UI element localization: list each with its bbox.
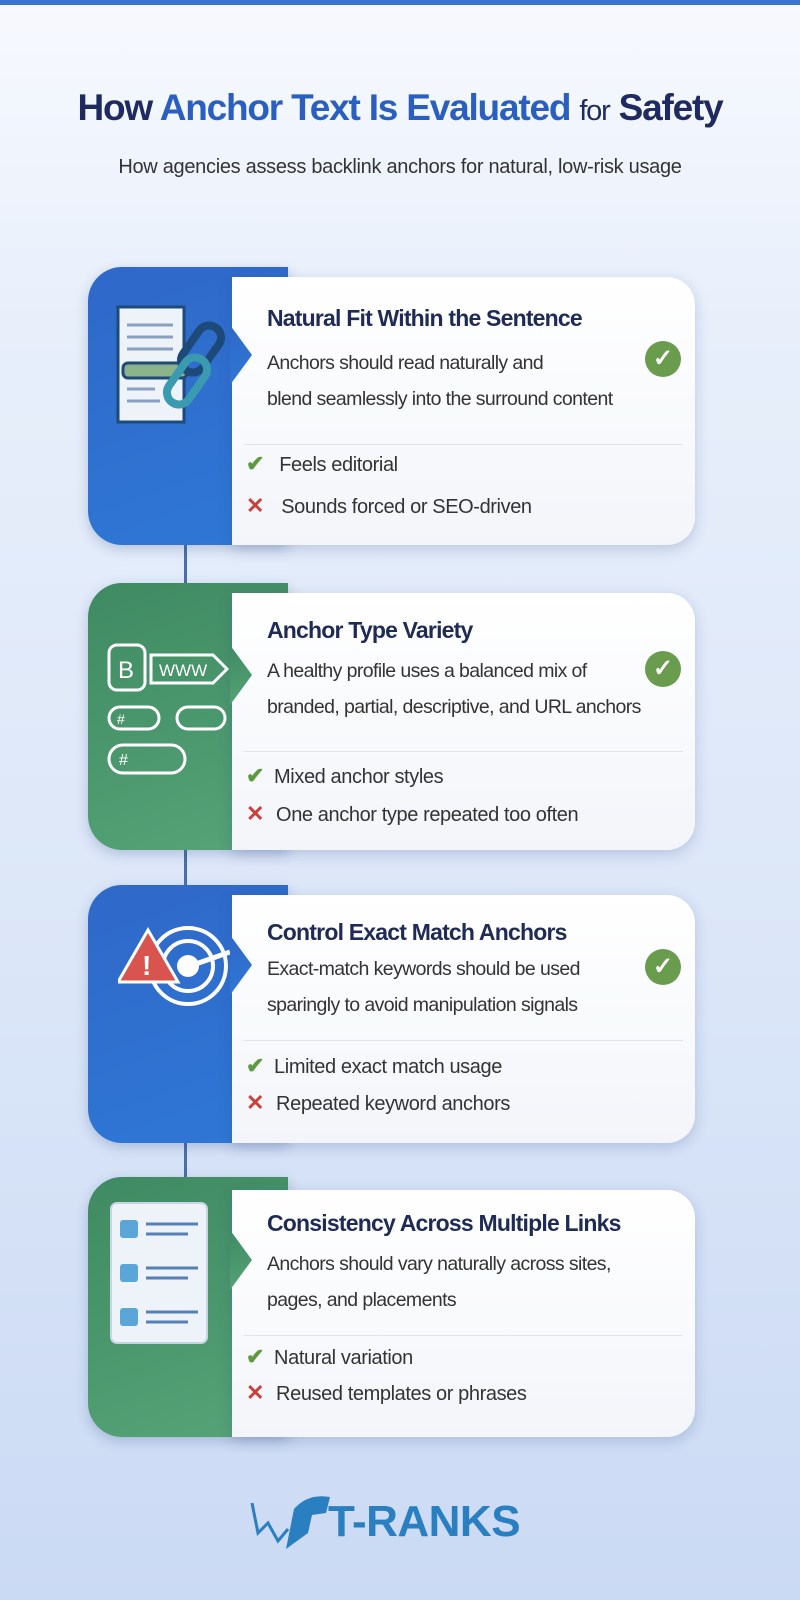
panel: anchor type variety: ✔ Mixed anchor styles	[246, 763, 443, 788]
icon: anchor tags: B	[118, 657, 134, 684]
panel: natural fit: ✕ Sounds forced or SEO-driven	[246, 493, 532, 518]
panel: exact match: ✓	[653, 953, 673, 980]
panel: exact match: sparingly to avoid manipulation signals	[267, 994, 577, 1016]
logo: T-RANKS	[328, 1497, 520, 1546]
icon: anchor tags: #	[119, 752, 128, 769]
icon: checklist	[110, 1202, 208, 1344]
panel: natural fit	[82, 265, 702, 558]
panel: anchor type variety: ✓	[653, 655, 673, 682]
icon: anchor tags: WWW	[159, 661, 207, 680]
panel: anchor type variety: Anchor Type Variety	[267, 617, 473, 643]
panel: natural fit: ✓	[653, 345, 673, 372]
subtitle: How agencies assess backlink anchors for natural, low-risk usage	[118, 156, 682, 178]
icon: anchor tags	[108, 644, 229, 774]
panel: anchor type variety	[82, 582, 701, 863]
panel: natural fit: blend seamlessly into the surround content	[267, 388, 613, 410]
icon: anchor tags: #	[117, 711, 125, 727]
icon: document with link	[116, 306, 225, 424]
panel: consistency: Consistency Across Multiple Links	[267, 1210, 621, 1236]
icon: warning target	[118, 926, 230, 1006]
panel: natural fit: Natural Fit Within the Sentence	[267, 305, 582, 331]
panel: exact match: Control Exact Match Anchors	[267, 919, 567, 945]
panel: exact match: Exact-match keywords should be used	[267, 958, 580, 980]
panel: exact match: ✕ Repeated keyword anchors	[246, 1090, 510, 1115]
panel: anchor type variety: branded, partial, descriptive, and URL anchors	[267, 696, 641, 718]
logo	[250, 1496, 520, 1549]
panel: exact match	[82, 884, 701, 1156]
panel: consistency: ✕ Reused templates or phrases	[246, 1380, 526, 1405]
panel: anchor type variety: A healthy profile uses a balanced mix of	[267, 660, 587, 682]
panel: anchor type variety: ✕ One anchor type repeated too often	[246, 801, 578, 826]
panel: consistency	[82, 1176, 701, 1450]
panel: consistency: pages, and placements	[267, 1289, 456, 1311]
panel: natural fit: Anchors should read naturally and	[267, 352, 543, 374]
title: How Anchor Text Is Evaluated for Safety	[77, 87, 723, 128]
icon: warning target: !	[142, 950, 151, 981]
panel: natural fit: ✔ Feels editorial	[246, 451, 398, 476]
panel: consistency: Anchors should vary naturally across sites,	[267, 1253, 611, 1275]
panel: consistency: ✔ Natural variation	[246, 1344, 413, 1369]
panel: exact match: ✔ Limited exact match usage	[246, 1053, 502, 1078]
